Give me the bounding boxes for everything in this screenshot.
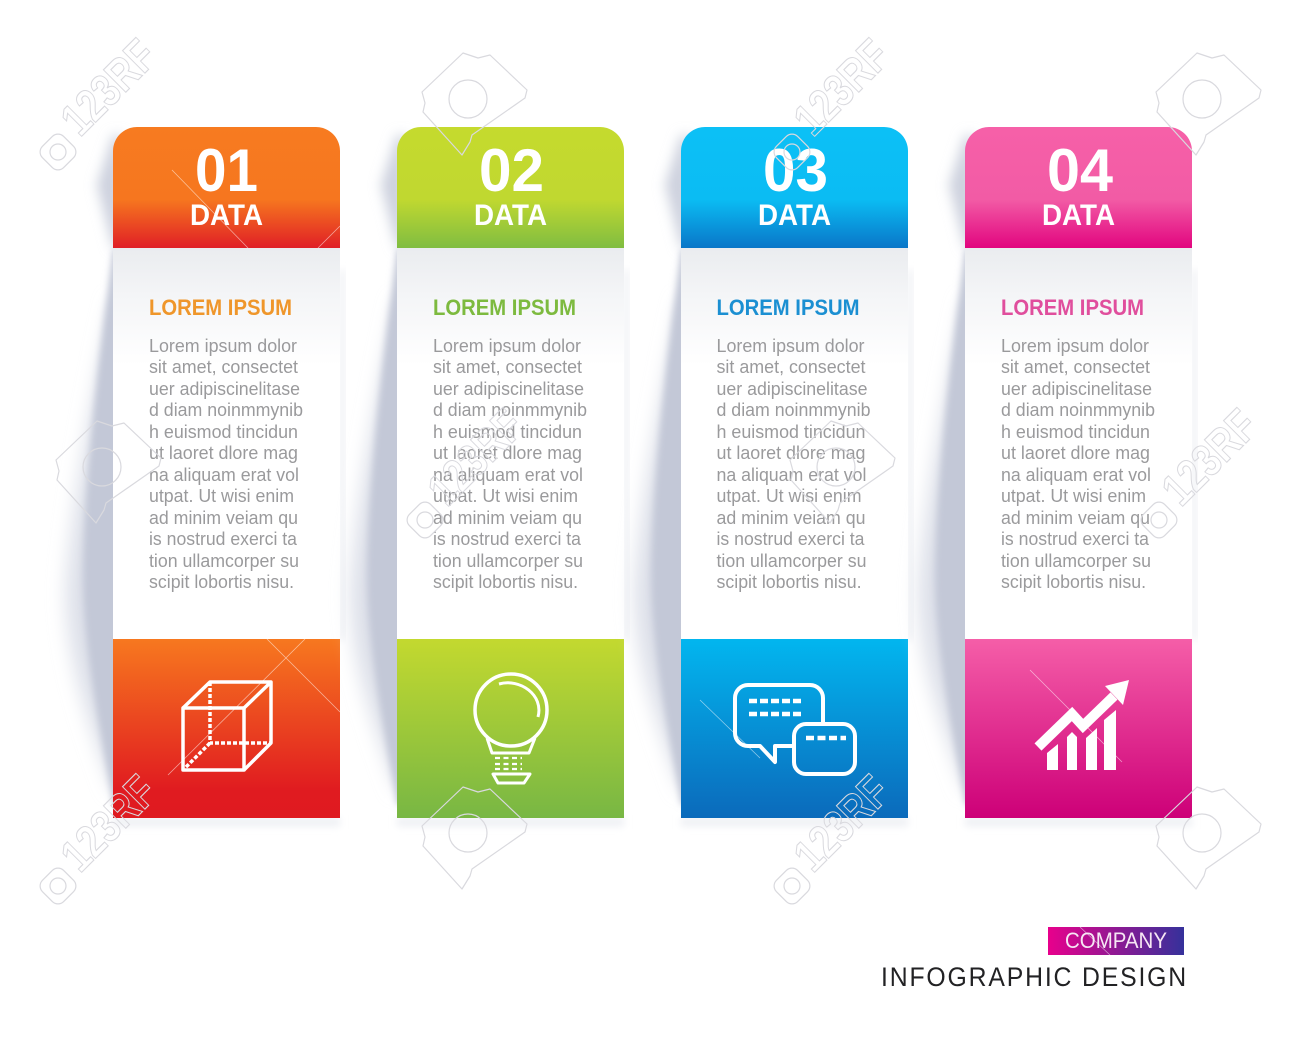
header tab 04	[965, 127, 1192, 248]
icon: chat bubbles	[735, 685, 855, 774]
body text 04: tion ullamcorper su	[1001, 551, 1151, 571]
footer block 01	[113, 639, 340, 818]
body text 04: Lorem ipsum dolor	[1001, 336, 1149, 356]
body text 04: na aliquam erat vol	[1001, 465, 1151, 485]
text card 02	[397, 248, 624, 640]
header tab 03	[681, 127, 908, 248]
body text 01: d diam noinmmynib	[149, 400, 303, 420]
header tab 01	[113, 127, 340, 248]
body text 03: uer adipiscinelitase	[716, 379, 868, 399]
body text 04: uer adipiscinelitase	[1001, 379, 1152, 399]
body text 01: na aliquam erat vol	[149, 465, 299, 485]
number 04: 04	[1047, 137, 1114, 204]
heading 04: LOREM IPSUM	[1001, 295, 1144, 320]
data label 03: DATA	[758, 199, 831, 232]
body text 02: is nostrud exerci ta	[433, 529, 582, 549]
body text 02: Lorem ipsum dolor	[433, 336, 581, 356]
body text 02: tion ullamcorper su	[433, 551, 583, 571]
heading 02: LOREM IPSUM	[433, 295, 576, 320]
body text 02: ut laoret dlore mag	[433, 443, 582, 463]
body text 04: d diam noinmmynib	[1001, 400, 1155, 420]
number 02: 02	[479, 137, 544, 204]
body text 01: uer adipiscinelitase	[149, 379, 300, 399]
body text 01: ut laoret dlore mag	[149, 443, 298, 463]
infographic design title: INFOGRAPHIC DESIGN	[881, 962, 1188, 992]
icon: light bulb	[475, 674, 547, 783]
header tab 02	[397, 127, 624, 248]
data label 01: DATA	[190, 199, 263, 232]
body text 02	[433, 336, 587, 592]
body text 01: is nostrud exerci ta	[149, 529, 298, 549]
body text 02: d diam noinmmynib	[433, 400, 587, 420]
body text 03: h euismod tincidun	[716, 422, 866, 442]
body text 01: Lorem ipsum dolor	[149, 336, 297, 356]
watermark layer: 123RF	[783, 29, 899, 145]
body text 04	[1001, 336, 1155, 592]
cast shadow 04	[918, 135, 1197, 826]
body text 03: ut laoret dlore mag	[716, 443, 866, 463]
body text 03: scipit lobortis nisu.	[716, 572, 862, 592]
body text 04: h euismod tincidun	[1001, 422, 1150, 442]
cast shadow 01	[66, 135, 345, 826]
body text 01: tion ullamcorper su	[149, 551, 299, 571]
body text 04: utpat. Ut wisi enim	[1001, 486, 1146, 506]
body text 03: tion ullamcorper su	[716, 551, 866, 571]
body text 04: is nostrud exerci ta	[1001, 529, 1150, 549]
body text 04: scipit lobortis nisu.	[1001, 572, 1146, 592]
body text 02: ad minim veiam qu	[433, 508, 582, 528]
icon: cube	[183, 682, 271, 770]
watermark layer: 123RF	[1151, 399, 1267, 515]
text card 04	[965, 248, 1192, 640]
panel: column 01	[66, 127, 345, 826]
watermark layer: 123RF	[417, 399, 533, 515]
body text 02: utpat. Ut wisi enim	[433, 486, 578, 506]
cast shadow 03	[634, 135, 913, 826]
body text 01: ad minim veiam qu	[149, 508, 298, 528]
body text 04: ad minim veiam qu	[1001, 508, 1150, 528]
text card 03	[681, 248, 908, 640]
company badge: COMPANY	[1065, 928, 1167, 953]
body text 03: na aliquam erat vol	[716, 465, 866, 485]
icon: growth chart	[1038, 680, 1129, 770]
body text 03: d diam noinmmynib	[716, 400, 870, 420]
panel: column 03	[634, 127, 913, 826]
body text 03: ad minim veiam qu	[716, 508, 866, 528]
panel: column 04	[918, 127, 1197, 826]
data label 02: DATA	[474, 199, 547, 232]
data label 04: DATA	[1042, 199, 1115, 232]
body text 03: sit amet, consectet	[716, 357, 866, 377]
body text 02: na aliquam erat vol	[433, 465, 583, 485]
watermark layer: 123RF	[783, 765, 899, 881]
body text 04: sit amet, consectet	[1001, 357, 1150, 377]
body text 02: sit amet, consectet	[433, 357, 582, 377]
body text 01	[149, 336, 303, 592]
number 03: 03	[763, 137, 828, 204]
number 01: 01	[195, 137, 258, 204]
body text 01: sit amet, consectet	[149, 357, 298, 377]
body text 03	[716, 336, 870, 592]
heading 03: LOREM IPSUM	[716, 295, 860, 320]
body text 02: scipit lobortis nisu.	[433, 572, 578, 592]
body text 03: Lorem ipsum dolor	[716, 336, 865, 356]
cast shadow 02	[350, 135, 629, 826]
panel: column 02	[350, 127, 629, 826]
footer block 02	[397, 639, 624, 818]
body text 02: h euismod tincidun	[433, 422, 582, 442]
body text 01: utpat. Ut wisi enim	[149, 486, 294, 506]
body text 01: h euismod tincidun	[149, 422, 298, 442]
body text 03: is nostrud exerci ta	[716, 529, 865, 549]
body text 04: ut laoret dlore mag	[1001, 443, 1150, 463]
watermark layer: 123RF	[50, 765, 166, 881]
body text 01: scipit lobortis nisu.	[149, 572, 294, 592]
text card 01	[113, 248, 340, 640]
heading 01: LOREM IPSUM	[149, 295, 292, 320]
body text 03: utpat. Ut wisi enim	[716, 486, 862, 506]
watermark layer: 123RF	[50, 29, 166, 145]
footer block 03	[681, 639, 908, 818]
body text 02: uer adipiscinelitase	[433, 379, 584, 399]
footer block 04	[965, 639, 1192, 818]
